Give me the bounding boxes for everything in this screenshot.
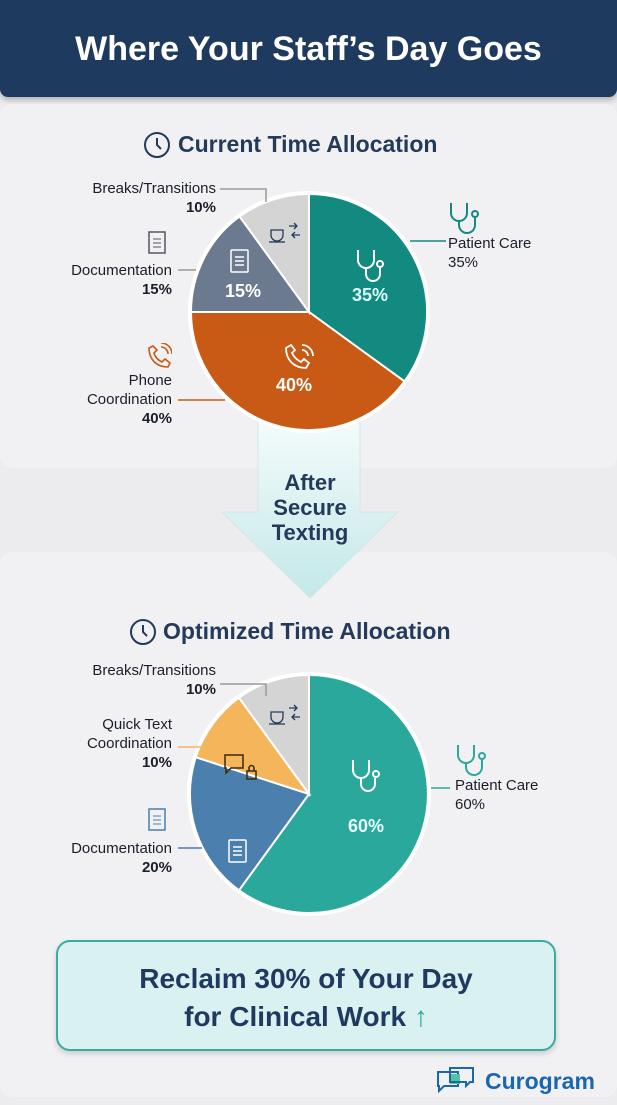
heading: current: Current Time Allocation: [178, 131, 437, 157]
pie chart: current: 15%: [225, 281, 261, 301]
label: patient care current: [448, 203, 531, 271]
label: quick text: [87, 716, 172, 771]
label: patient care optimized: 60%: [455, 796, 485, 813]
pie chart: current: 40%: [276, 375, 312, 395]
label: breaks current: [92, 180, 216, 216]
header bar: [0, 0, 617, 97]
callout: Reclaim 30% of Your Day: [139, 963, 473, 994]
pie chart: current: 35%: [352, 285, 388, 305]
label: patient care current: Patient Care: [448, 235, 531, 252]
label: documentation optimized: Documentation: [71, 840, 172, 857]
label: documentation current: Documentation: [71, 262, 172, 279]
label: quick text: Coordination: [87, 735, 172, 752]
label: patient care optimized: [455, 745, 538, 813]
arrow: after secure texting: [222, 422, 398, 598]
label: breaks current: Breaks/Transitions: [92, 180, 216, 197]
label: quick text: Quick Text: [102, 716, 172, 733]
arrow: after secure texting: Texting: [272, 520, 348, 545]
panel: current: [0, 104, 617, 468]
label: phone current: Phone: [129, 372, 172, 389]
pie chart: optimized: 60%: [348, 816, 384, 836]
label: quick text: 10%: [142, 754, 172, 771]
logo: [437, 1067, 595, 1094]
label: patient care optimized: Patient Care: [455, 777, 538, 794]
label: phone current: 40%: [142, 410, 172, 427]
arrow: after secure texting: Secure: [273, 495, 347, 520]
label: documentation current: 15%: [142, 281, 172, 298]
heading: optimized: Optimized Time Allocation: [163, 618, 451, 644]
panel: optimized: [0, 552, 617, 1097]
callout: for Clinical Work ↑: [184, 1001, 428, 1032]
label: breaks optimized: 10%: [186, 681, 216, 698]
label: breaks optimized: [92, 662, 216, 698]
label: documentation optimized: [71, 808, 172, 876]
title: Where Your Staff’s Day Goes: [75, 30, 542, 68]
label: phone current: Coordination: [87, 391, 172, 408]
label: breaks current: 10%: [186, 199, 216, 216]
label: documentation current: [71, 231, 172, 298]
label: breaks optimized: Breaks/Transitions: [92, 662, 216, 679]
pie chart: current: [178, 188, 446, 433]
arrow: after secure texting: After: [284, 470, 336, 495]
callout: [56, 940, 556, 1051]
logo: Curogram: [485, 1068, 595, 1094]
label: documentation optimized: 20%: [142, 859, 172, 876]
label: patient care current: 35%: [448, 254, 478, 271]
label: phone current: [87, 343, 172, 427]
